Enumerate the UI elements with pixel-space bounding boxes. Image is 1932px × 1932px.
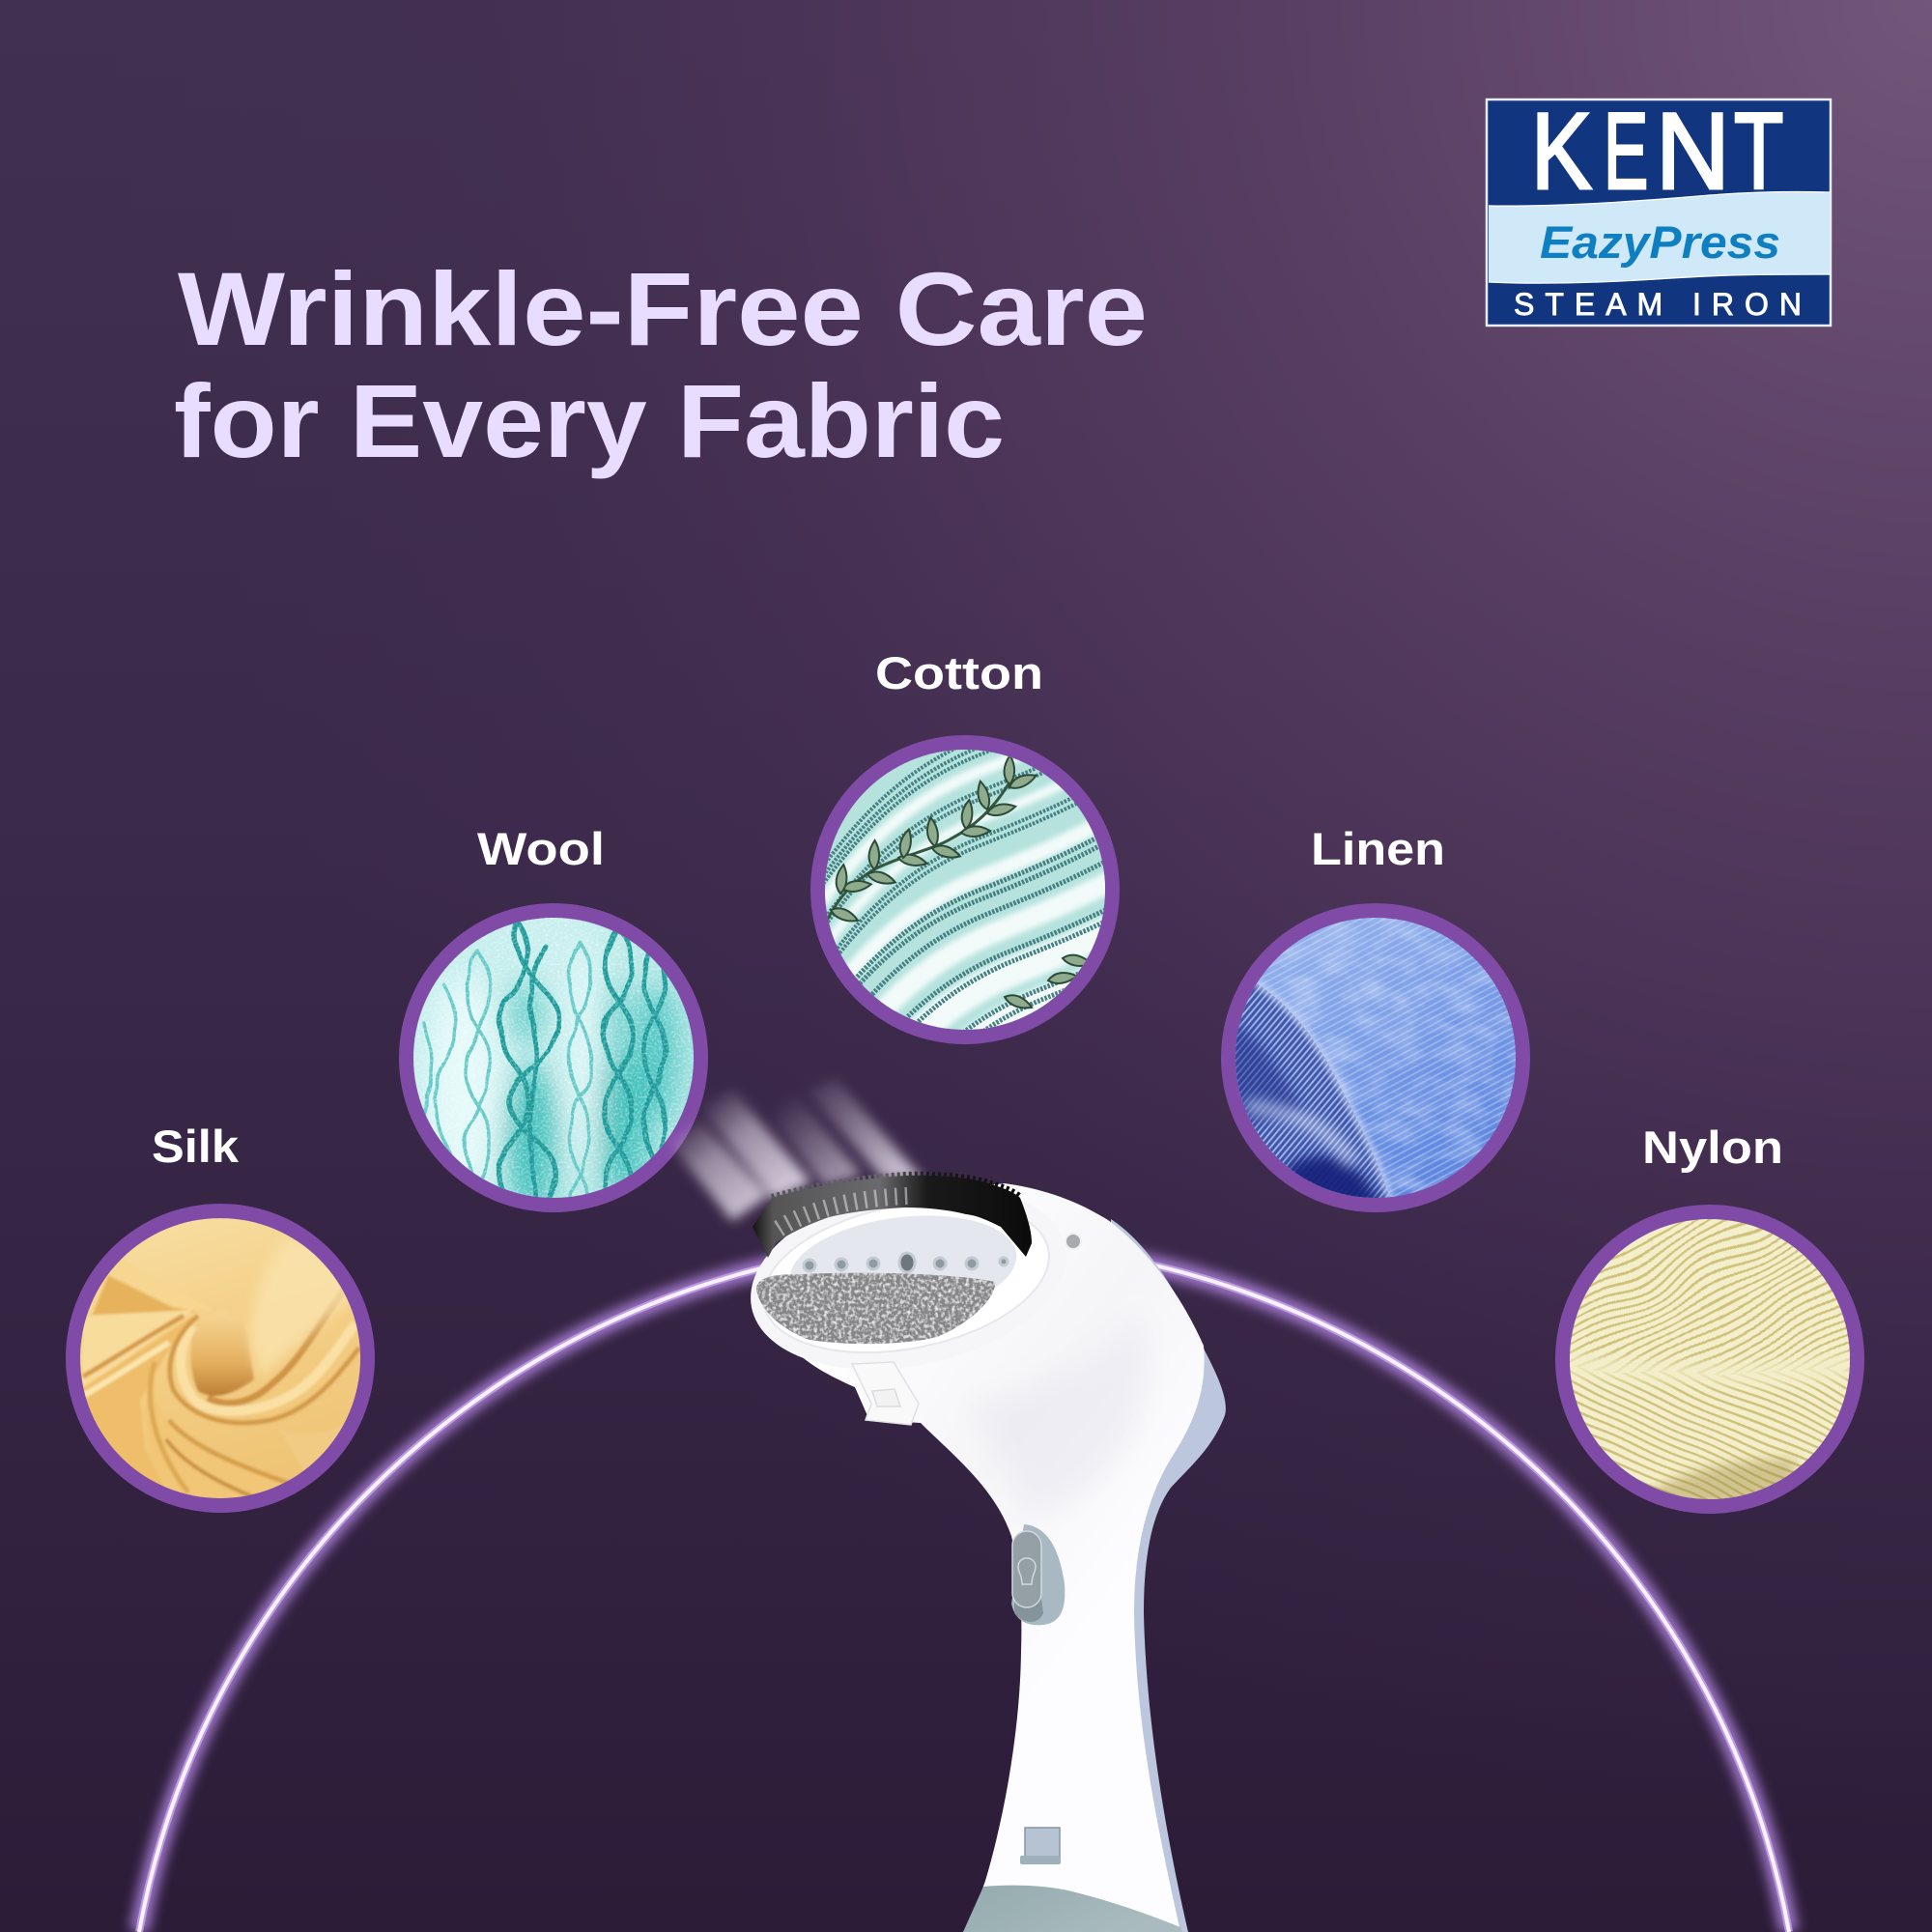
fabric circle: cotton <box>810 735 1120 1044</box>
head ring <box>734 1159 1082 1395</box>
label: Silk: Silk <box>152 1121 240 1172</box>
steamer back shell <box>1101 1219 1226 1932</box>
body shading <box>1001 1352 1134 1495</box>
dark dotted stripes <box>825 750 1104 1030</box>
logo: KENT EazyPress Steam Iron: K <box>1531 90 1592 212</box>
white bands <box>825 753 1105 1030</box>
glowing arc <box>139 1243 1789 1932</box>
label: Wool: Wool <box>477 823 605 874</box>
logo: KENT EazyPress Steam Iron: STEAM IRON <box>1514 287 1802 322</box>
fabric circle: linen <box>1221 903 1530 1212</box>
garment steamer <box>734 1159 1226 1932</box>
title <box>174 250 1148 479</box>
label: Linen: Linen <box>1311 823 1445 874</box>
label: Nylon: Nylon <box>1642 1122 1783 1173</box>
steam holes <box>804 1253 1008 1272</box>
side hole <box>1065 1234 1081 1249</box>
fabric circle: wool <box>399 903 708 1212</box>
fabric fold <box>1236 983 1389 1198</box>
steamer body <box>763 1183 1205 1932</box>
soleplate <box>784 1204 1022 1331</box>
fabric circle: nylon <box>1555 1205 1864 1514</box>
fabric circle: silk <box>66 1204 375 1513</box>
logo: KENT EazyPress Steam Iron: T <box>1734 90 1783 212</box>
bristle brush <box>753 1176 1032 1258</box>
title: for Every Fabric <box>174 362 1005 479</box>
cable stitching <box>422 922 668 1198</box>
steam <box>668 1080 923 1221</box>
steam button <box>1011 1524 1065 1625</box>
water tank <box>963 1886 1182 1932</box>
latch <box>852 1362 919 1425</box>
logo: KENT EazyPress Steam Iron <box>1487 90 1831 326</box>
water window <box>1020 1828 1061 1864</box>
logo: KENT EazyPress Steam Iron: N <box>1656 92 1730 213</box>
vine of leaves <box>826 755 1093 1012</box>
label: Cotton: Cotton <box>875 647 1043 698</box>
logo: KENT EazyPress Steam Iron: EazyPress <box>1540 216 1780 268</box>
logo: KENT EazyPress Steam Iron: E <box>1604 91 1648 212</box>
grey pad <box>756 1273 995 1344</box>
title: Wrinkle-Free Care <box>178 250 1148 367</box>
white highlights and teal shading <box>429 937 676 1217</box>
